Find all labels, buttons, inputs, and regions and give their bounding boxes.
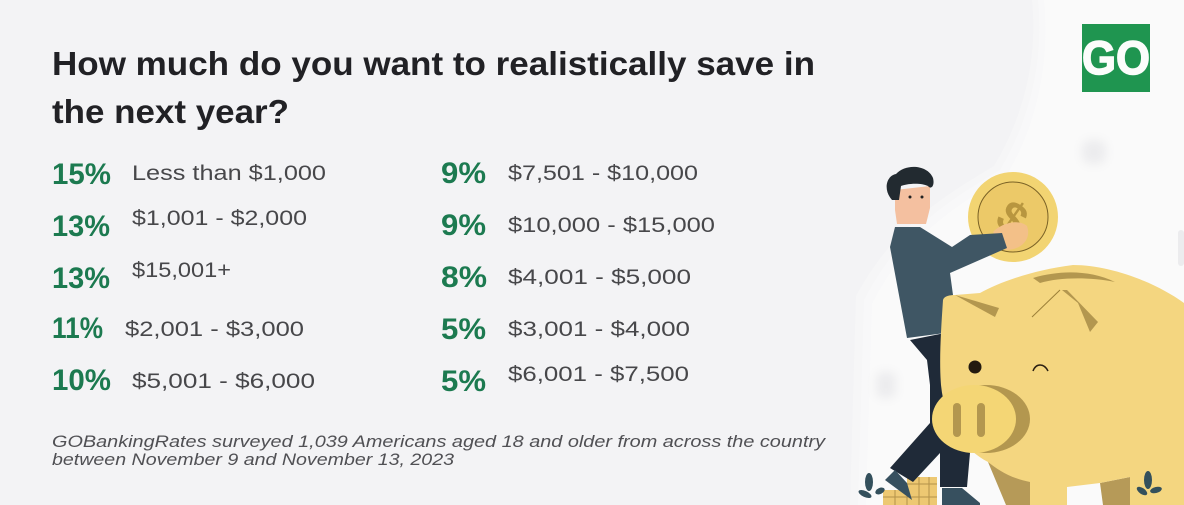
row: 10% $5,001 - $6,000: 10% [52,364,111,397]
icon: piggy bank [932,265,1184,505]
left savings column [52,158,326,397]
row: 9% $7,501 - $10,000: $7,501 - $10,000 [508,161,698,185]
row: 5% $3,001 - $4,000: 5% [441,313,486,346]
row: 11% $2,001 - $3,000: $2,001 - $3,000 [125,317,304,341]
row: 15% less than $1,000: Less than $1,000 [132,161,326,185]
row: 13% $15,001+: $15,001+ [132,258,231,282]
title: How much do you want to realistically save in [52,45,815,82]
row: 9% $10,000 - $15,000: 9% [441,209,486,242]
title: the next year? [52,93,289,130]
row: 15% less than $1,000: 15% [52,158,111,191]
footnote: between November 9 and November 13, 2023 [52,450,455,469]
row: 13% $1,001 - $2,000: $1,001 - $2,000 [132,206,307,230]
icon: dollar coin: $ [987,189,1038,246]
row: 9% $10,000 - $15,000: $10,000 - $15,000 [508,213,715,237]
icon: dollar coin [968,172,1058,262]
row: 11% $2,001 - $3,000 [52,312,304,345]
row: 5% $6,001 - $7,500: 5% [441,365,486,398]
man: shoes [885,470,980,505]
icon: coins stack [883,477,937,505]
row: 9% $10,000 - $15,000 [441,209,715,242]
man: head [887,167,934,224]
row: 5% $6,001 - $7,500: $6,001 - $7,500 [508,362,689,386]
row: 10% $5,001 - $6,000: $5,001 - $6,000 [132,369,315,393]
footnote: GOBankingRates surveyed 1,039 Americans aged 18 and older from across the country [52,432,827,451]
row: 5% $3,001 - $4,000: $3,001 - $4,000 [508,317,690,341]
row: 13% $1,001 - $2,000: 13% [52,210,110,243]
icon: left plant [857,473,886,500]
man: hand [993,222,1028,250]
row: 8% $4,001 - $5,000: $4,001 - $5,000 [508,265,691,289]
row: 11% $2,001 - $3,000: 11% [52,312,103,345]
footnote [52,432,827,469]
row: 5% $6,001 - $7,500 [441,362,689,398]
row: 13% $15,001+ [52,258,231,295]
right savings column [441,157,715,398]
row: 9% $7,501 - $10,000: 9% [441,157,486,190]
man: sweater [890,227,1007,338]
row: 15% less than $1,000 [52,158,326,191]
row: 9% $7,501 - $10,000 [441,157,698,190]
illustration: man with coin and piggy bank [857,167,1184,505]
row: 8% $4,001 - $5,000 [441,261,691,294]
logo: GO [1082,31,1150,84]
row: 13% $15,001+: 13% [52,262,110,295]
row: 10% $5,001 - $6,000 [52,364,315,397]
icon: right plant [1135,471,1163,497]
man: trousers [890,333,970,487]
row: 5% $3,001 - $4,000 [441,313,690,346]
title [52,45,815,130]
row: 13% $1,001 - $2,000 [52,206,307,243]
row: 8% $4,001 - $5,000: 8% [441,261,487,294]
